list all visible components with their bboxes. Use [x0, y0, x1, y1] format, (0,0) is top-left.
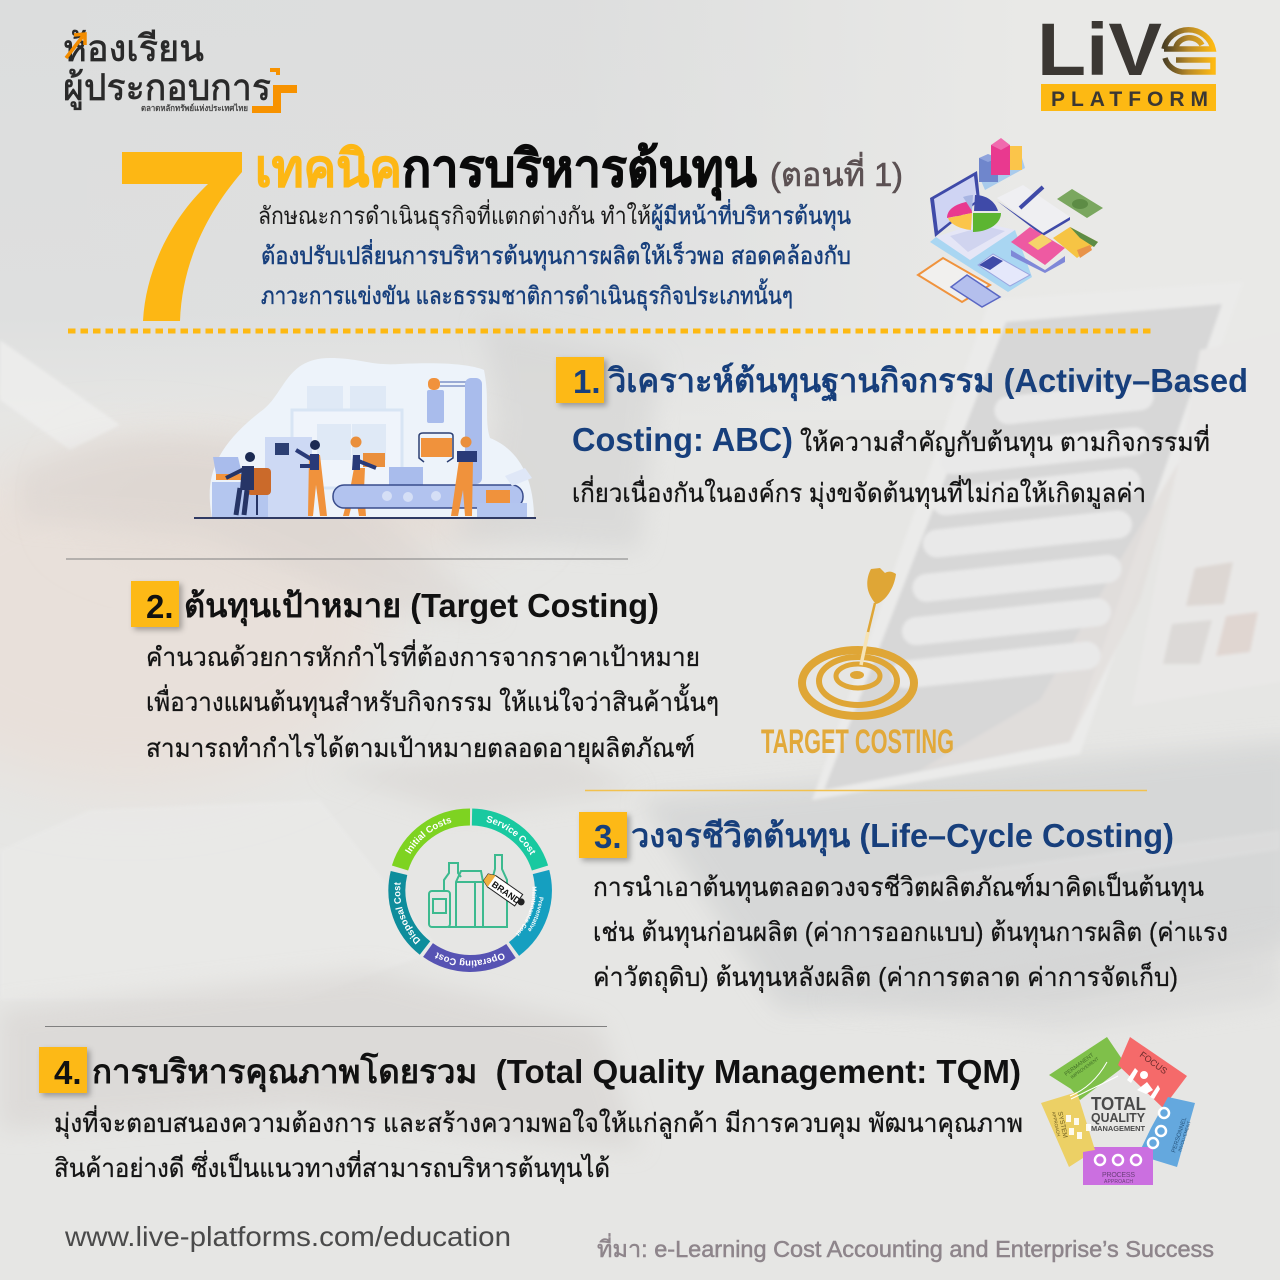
number badge 3: 3. [594, 818, 622, 855]
title: (ตอนที่ 1) [770, 152, 903, 193]
icon: TQM pentagon cards: PERMANENT [1064, 1052, 1096, 1078]
logo: ห้องเรียนผู้ประกอบการ: ผู้ประกอบการ [63, 67, 271, 110]
section 1: activity-based costing [194, 357, 1248, 518]
icon: TQM pentagon cards: PROCESS [1102, 1172, 1135, 1179]
icon: factory illustration [194, 358, 536, 518]
section 2 heading and text [146, 587, 719, 764]
section 4: total quality management [39, 1037, 1195, 1185]
section 2 heading and text: คำนวณด้วยการหักกำไรที่ต้องการจากราคาเป้าหมาย [146, 639, 700, 672]
label: target costing: TARGET COSTING [761, 723, 954, 761]
icon: product life-cycle wheel: Preventative [528, 897, 544, 932]
icon: dart target [761, 568, 954, 761]
section 4 heading and text: มุ่งที่จะตอบสนองความต้องการ และสร้างความพอใจให้แก่ลูกค้า มีการควบคุม พัฒนาคุณภาพ [54, 1105, 1023, 1139]
section 2: target costing [131, 568, 954, 764]
intro text: ภาวะการแข่งขัน และธรรมชาติการดำเนินธุรกิจประเภทนั้นๆ [261, 278, 793, 311]
icon: TQM pentagon cards: TOTAL [1091, 1094, 1146, 1114]
logo: ห้องเรียนผู้ประกอบการ: ตลาดหลักทรัพย์แห่งประเทศไทย [141, 103, 248, 113]
intro text: ลักษณะการดำเนินธุรกิจที่แตกต่างกัน ทำให้ผู้มีหน้าที่บริหารต้นทุน [258, 199, 851, 231]
icon: product life-cycle wheel: Initial Costs [404, 818, 452, 854]
section 3 heading and text: การนำเอาต้นทุนตลอดวงจรชีวิตผลิตภัณฑ์มาคิดเป็นต้นทุน [593, 871, 1204, 903]
icon: TQM pentagon cards: MANAGEMENT [1091, 1124, 1145, 1133]
icon: product life-cycle wheel: BRAND [490, 879, 523, 906]
footer: source: ที่มา: e-Learning Cost Accounting and Enterprise’s Success [597, 1233, 1214, 1262]
section 1 heading and text: Costing: ABC) [572, 421, 793, 458]
intro text: ต้องปรับเปลี่ยนการบริหารต้นทุนการผลิตให้เร็วพอ สอดคล้องกับ [261, 239, 851, 271]
icon: product life-cycle wheel: Maintenance Cost [516, 886, 537, 936]
logo: Live Platform [1037, 8, 1216, 111]
icon: product life-cycle wheel: Operating Cost [434, 952, 505, 968]
icon: product life-cycle wheel: Disposal Cost [394, 882, 420, 944]
icon: TQM pentagon cards: APPROACH [1104, 1179, 1133, 1185]
section 3 heading and text: วงจรชีวิตต้นทุน (Life–Cycle Costing) [631, 817, 1174, 857]
section 1 heading and text: ให้ความสำคัญกับต้นทุน ตามกิจกรรมที่ [800, 424, 1210, 458]
icon: TQM pentagon cards [1041, 1037, 1195, 1185]
section 4 heading and text: การบริหารคุณภาพโดยรวม (Total Quality Management: TQM) [92, 1052, 1021, 1093]
section 4 heading and text [54, 1052, 1023, 1184]
number badge 2: 2. [146, 588, 174, 625]
number badge 2 [131, 581, 179, 627]
number badge 3 [579, 812, 627, 858]
icon: TQM pentagon cards: FOCUS [1138, 1050, 1169, 1076]
title: เทคนิคการบริหารต้นทุน [255, 140, 757, 201]
icon: TQM pentagon cards: INVOLVEMENT [1177, 1120, 1192, 1152]
intro text [258, 199, 851, 311]
icon: product life-cycle wheel [388, 808, 552, 972]
section 3: life-cycle costing [388, 808, 1228, 993]
section 1 heading and text [572, 362, 1248, 509]
section 4 heading and text: สินค้าอย่างดี ซึ่งเป็นแนวทางที่สามารถบริหารต้นทุนได้ [54, 1150, 610, 1184]
logo: ห้องเรียนผู้ประกอบการ: ห้องเรียน [63, 28, 204, 69]
logo: ห้องเรียนผู้ประกอบการ [63, 28, 297, 113]
footer: website: www.live-platforms.com/education [64, 1221, 511, 1252]
number badge 1 [556, 357, 604, 403]
section 1 heading and text: เกี่ยวเนื่องกันในองค์กร มุ่งขจัดต้นทุนที่ไม่ก่อให้เกิดมูลค่า [572, 475, 1146, 509]
number badge 1: 1. [573, 363, 601, 400]
icon: TQM pentagon cards: IMPROVEMENT [1070, 1056, 1100, 1080]
number badge 4 [39, 1047, 87, 1093]
logo: Live Platform: LiV [1037, 8, 1162, 91]
logo: Live Platform: PLATFORM [1051, 88, 1208, 111]
big number 7 [122, 152, 242, 321]
icon: TQM pentagon cards: PERSONNEL [1171, 1116, 1189, 1154]
icon: TQM pentagon cards: QUALITY [1091, 1111, 1146, 1125]
icon: TQM pentagon cards: APPROACH [1051, 1111, 1061, 1137]
section 3 heading and text [593, 817, 1228, 993]
section 1 heading and text: วิเคราะห์ต้นทุนฐานกิจกรรม (Activity–Based [608, 362, 1248, 402]
icon: finance isometric illustration [918, 138, 1103, 307]
section 2 heading and text: เพื่อวางแผนต้นทุนสำหรับกิจกรรม ให้แน่ใจว่าสินค้านั้นๆ [146, 683, 719, 718]
section 2 heading and text: สามารถทำกำไรได้ตามเป้าหมายตลอดอายุผลิตภัณฑ์ [146, 733, 695, 764]
icon: product life-cycle wheel: Service Cost [486, 816, 536, 856]
dotted divider [68, 328, 1155, 334]
icon: TQM pentagon cards: SYSTEM [1056, 1111, 1068, 1139]
section 3 heading and text: ค่าวัตถุดิบ) ต้นทุนหลังผลิต (ค่าการตลาด ค่าการจัดเก็บ) [593, 961, 1178, 993]
section 3 heading and text: เช่น ต้นทุนก่อนผลิต (ค่าการออกแบบ) ต้นทุนการผลิต (ค่าแรง [593, 917, 1228, 948]
number badge 4: 4. [54, 1054, 82, 1091]
section 2 heading and text: ต้นทุนเป้าหมาย (Target Costing) [184, 587, 659, 627]
